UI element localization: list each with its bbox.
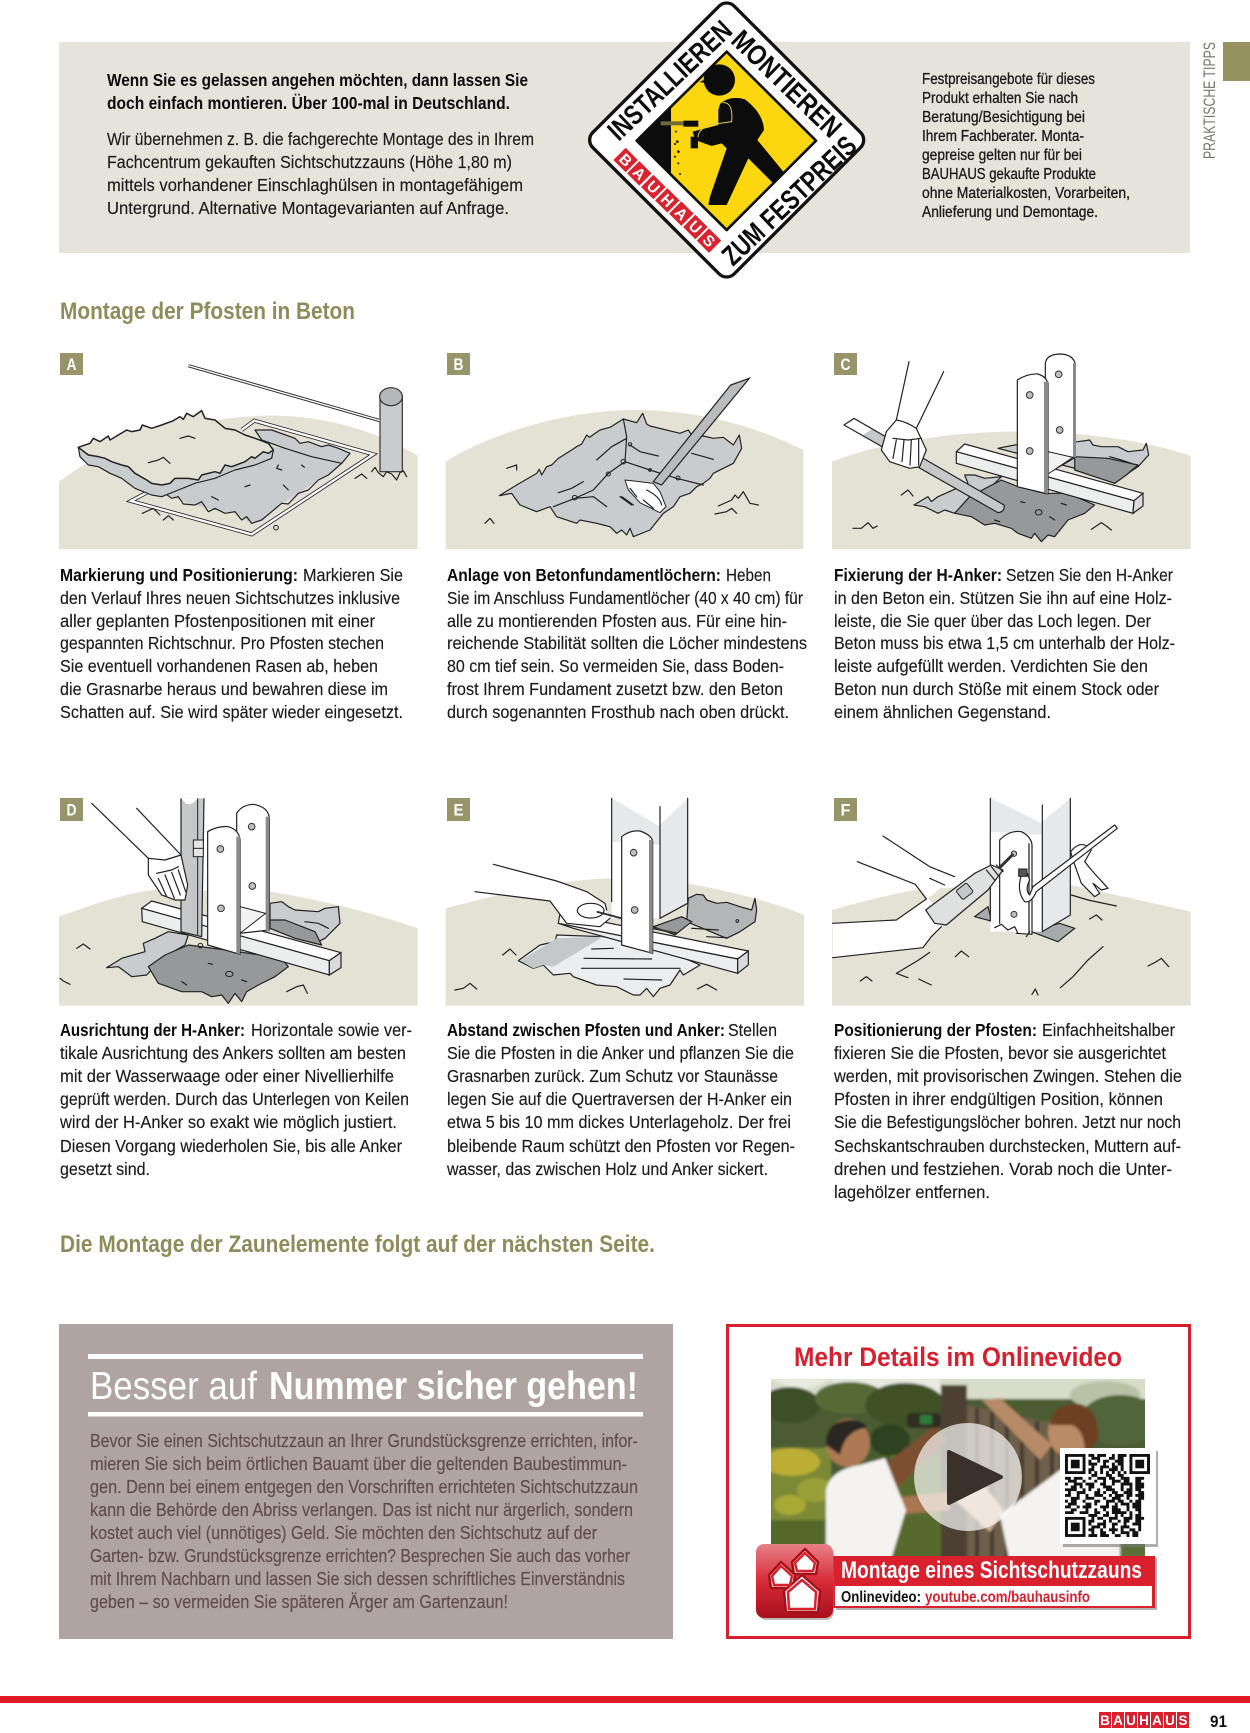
fixed price note: Produkt erhalten Sie nach bbox=[922, 90, 1078, 107]
text: step E: legen Sie auf die Quertraversen der H-Anker ein bbox=[447, 1089, 792, 1109]
text: step A bbox=[60, 565, 403, 722]
text: step C: leiste, die Sie quer über das Loch legen. Der bbox=[834, 611, 1151, 631]
text: step F: drehen und festziehen. Vorab noch die Unter- bbox=[834, 1159, 1172, 1179]
text: step C: Fixierung der H-Anker: bbox=[834, 565, 1002, 585]
text: step C: Setzen Sie den H-Anker bbox=[1006, 565, 1173, 585]
text: step E: Grasnarben zurück. Zum Schutz vor Staunässe bbox=[447, 1066, 778, 1086]
text: step E: Abstand zwischen Pfosten und Anker: bbox=[447, 1020, 725, 1040]
red BAUHAUS tiles bbox=[613, 148, 721, 253]
text: step D: Ausrichtung der H-Anker: bbox=[60, 1020, 245, 1040]
step badge C bbox=[834, 353, 857, 375]
panel body text: mieren Sie sich beim örtlichen Bauamt über die geltenden Baubestimmun- bbox=[90, 1454, 627, 1474]
text: step B: reichende Stabilität sollten die Löcher mindestens bbox=[447, 633, 807, 653]
intro text: Fachcentrum gekauften Sichtschutzzauns (Höhe 1,80 m) bbox=[107, 152, 512, 172]
illustration C: fixing the H-anchor bbox=[832, 354, 1191, 549]
red banner bbox=[833, 1556, 1157, 1610]
fixed price note: gepreise gelten nur für bei bbox=[922, 147, 1082, 164]
badge: Installieren Montieren zum Festpreis bbox=[585, 0, 868, 281]
banner URL bbox=[841, 1589, 1090, 1606]
text: step F: lagehölzer entfernen. bbox=[834, 1182, 990, 1202]
badge lettering: MONTIEREN bbox=[725, 24, 848, 144]
text: step C: in den Beton ein. Stützen Sie ihn auf eine Holz- bbox=[834, 588, 1172, 608]
red BAUHAUS tiles: U bbox=[685, 218, 705, 238]
step badge D: D bbox=[66, 800, 76, 820]
red BAUHAUS tiles: A bbox=[629, 164, 649, 184]
fixed price note: Beratung/Besichtigung bei bbox=[922, 109, 1085, 126]
step badge B bbox=[447, 353, 470, 375]
text: step E: Sie die Pfosten in die Anker und pflanzen Sie die bbox=[447, 1043, 794, 1063]
text: step C: leiste aufgefüllt werden. Verdichten Sie den bbox=[834, 656, 1148, 676]
intro text bbox=[107, 70, 534, 218]
page number: 91 bbox=[1210, 1712, 1227, 1731]
fixed price note bbox=[922, 71, 1130, 221]
panel body text: kann die Behörde den Abriss verlangen. Das ist nicht nur ärgerlich, sondern bbox=[90, 1500, 633, 1520]
section label: PRAKTISCHE TIPPS bbox=[1200, 42, 1219, 159]
text: step A: Schatten auf. Sie wird später wieder eingesetzt. bbox=[60, 702, 403, 722]
fixed price note: ohne Materialkosten, Vorarbeiten, bbox=[922, 185, 1130, 202]
panel body text: Bevor Sie einen Sichtschutzzaun an Ihrer Grundstücksgrenze errichten, infor- bbox=[90, 1431, 638, 1451]
intro text: Wir übernehmen z. B. die fachgerechte Montage des in Ihrem bbox=[107, 129, 534, 149]
text: step F: Sechskantschrauben durchstecken, Muttern auf- bbox=[834, 1136, 1181, 1156]
panel body text: kostet auch viel (unnötiges) Geld. Sie möchten den Sichtschutz auf der bbox=[90, 1523, 597, 1543]
red BAUHAUS tiles: S bbox=[699, 232, 718, 251]
side tab bbox=[1200, 42, 1250, 159]
text: step B: durch sogenannten Frosthub nach oben drückt. bbox=[447, 702, 789, 722]
top info panel bbox=[59, 42, 1190, 253]
illustration A: marking and removing turf bbox=[59, 366, 418, 549]
footer BAUHAUS logo: A bbox=[1152, 1713, 1162, 1728]
text: step B: Anlage von Betonfundamentlöchern: bbox=[447, 565, 721, 585]
video still photo bbox=[771, 1379, 1145, 1556]
text: step B: alle zu montierenden Pfosten aus. Für eine hin- bbox=[447, 611, 787, 631]
fixed price note: Ihrem Fachberater. Monta- bbox=[922, 128, 1084, 145]
text: step D: gesetzt sind. bbox=[60, 1159, 150, 1179]
heading: Montage der Pfosten in Beton: Montage der Pfosten in Beton bbox=[60, 298, 355, 325]
left worker bbox=[884, 1425, 946, 1488]
intro text: doch einfach montieren. Über 100-mal in Deutschland. bbox=[107, 93, 510, 113]
text: step D: geprüft werden. Durch das Unterlegen von Keilen bbox=[60, 1089, 409, 1109]
text: step F: werden, mit provisorischen Zwingen. Stehen die bbox=[833, 1066, 1182, 1086]
intro text: Wenn Sie es gelassen angehen möchten, dann lassen Sie bbox=[107, 70, 528, 90]
banner title: Montage eines Sichtschutzzauns bbox=[841, 1557, 1142, 1584]
text: step C: Beton muss bis etwa 1,5 cm unterhalb der Holz- bbox=[834, 633, 1175, 653]
step badge C: C bbox=[840, 355, 850, 374]
text: step A: die Grasnarbe heraus und bewahren diese im bbox=[60, 679, 388, 699]
fixed price note: Festpreisangebote für dieses bbox=[922, 71, 1095, 88]
footer BAUHAUS logo: U bbox=[1165, 1713, 1175, 1728]
text: step E: Stellen bbox=[728, 1020, 777, 1040]
illustration E: spacing between post and anchor bbox=[446, 798, 804, 1006]
text: step B bbox=[447, 565, 807, 722]
badge lettering: ZUM FESTPREIS bbox=[716, 130, 863, 271]
red BAUHAUS tiles: U bbox=[643, 178, 663, 198]
panel title bbox=[90, 1365, 638, 1408]
fixed price note: BAUHAUS gekaufte Produkte bbox=[922, 166, 1096, 183]
text: step F bbox=[833, 1020, 1182, 1202]
step badge B: B bbox=[454, 355, 464, 374]
fence bbox=[966, 1405, 1060, 1563]
footer BAUHAUS logo: H bbox=[1139, 1713, 1149, 1728]
text: step F: Positionierung der Pfosten: bbox=[834, 1020, 1037, 1040]
text: step D: Diesen Vorgang wiederholen Sie, bis alle Anker bbox=[60, 1136, 402, 1156]
banner URL: youtube.com/bauhausinfo bbox=[925, 1589, 1090, 1606]
worker figure bbox=[661, 64, 783, 205]
banner URL: Onlinevideo: bbox=[841, 1589, 921, 1606]
step badge F: F bbox=[840, 800, 850, 820]
text: step F: Sie die Befestigungslöcher bohren. Jetzt nur noch bbox=[834, 1112, 1181, 1132]
text: step E: bleibende Raum schützt den Pfosten vor Regen- bbox=[447, 1136, 795, 1156]
panel: Besser auf Nummer sicher gehen bbox=[59, 1324, 673, 1639]
intro text: mittels vorhandener Einschlaghülsen in montagefähigem bbox=[107, 175, 523, 195]
step badge D bbox=[60, 798, 83, 821]
panel body text: mit Ihrem Nachbarn und lassen Sie sich dessen schriftliches Einverständnis bbox=[90, 1569, 625, 1589]
text: step F: Pfosten in ihrer endgültigen Position, können bbox=[834, 1089, 1163, 1109]
panel title: Besser auf bbox=[90, 1365, 257, 1408]
play button bbox=[914, 1423, 1022, 1531]
text: step B: frost Ihrem Fundament zusetzt bzw. den Beton bbox=[447, 679, 783, 699]
text: step F: Einfachheitshalber bbox=[1042, 1020, 1175, 1040]
illustration F: drilling and clamping post bbox=[832, 798, 1191, 1006]
text: step C: einem ähnlichen Gegenstand. bbox=[834, 702, 1051, 722]
panel: Onlinevideo bbox=[728, 1326, 1190, 1638]
text: step A: Markieren Sie bbox=[303, 565, 403, 585]
panel body text bbox=[90, 1431, 638, 1612]
text: step A: gespannten Richtschnur. Pro Pfosten stechen bbox=[60, 633, 384, 653]
red BAUHAUS tiles: H bbox=[657, 191, 677, 211]
text: step D: wird der H-Anker so exakt wie möglich justiert. bbox=[59, 1112, 397, 1132]
footer BAUHAUS logo bbox=[1099, 1712, 1189, 1728]
text: step D: mit der Wasserwaage oder einer Nivellierhilfe bbox=[60, 1066, 394, 1086]
footer BAUHAUS logo: S bbox=[1178, 1713, 1188, 1728]
QR code bbox=[1060, 1448, 1158, 1547]
text: step C bbox=[834, 565, 1175, 722]
text: step E bbox=[446, 1020, 795, 1179]
illustration B: digging foundation holes bbox=[446, 378, 803, 549]
step badge E: E bbox=[454, 800, 464, 820]
right worker bbox=[982, 1398, 1052, 1460]
heading: next page note: Die Montage der Zaunelemente folgt auf der nächsten Seite. bbox=[60, 1231, 655, 1258]
panel title: Nummer sicher gehen! bbox=[269, 1365, 638, 1408]
text: step E: wasser, das zwischen Holz und Anker sickert. bbox=[446, 1159, 768, 1179]
footer BAUHAUS logo: U bbox=[1126, 1713, 1136, 1728]
step badge F bbox=[834, 798, 857, 821]
text: step B: Heben bbox=[726, 565, 771, 585]
panel body text: gen. Denn bei einem entgegen den Vorschriften errichteten Sichtschutzzaun bbox=[90, 1477, 638, 1497]
text: step B: Sie im Anschluss Fundamentlöcher (40 x 40 cm) für bbox=[447, 588, 803, 608]
footer BAUHAUS logo: A bbox=[1113, 1713, 1123, 1728]
text: step D bbox=[59, 1020, 412, 1179]
fixed price note: Anlieferung und Demontage. bbox=[922, 204, 1098, 221]
text: step A: Markierung und Positionierung: bbox=[60, 565, 298, 585]
text: step A: Sie eventuell vorhandenen Rasen ab, heben bbox=[60, 656, 378, 676]
step badge E bbox=[447, 798, 470, 821]
text: step B: 80 cm tief sein. So vermeiden Sie, dass Boden- bbox=[447, 656, 784, 676]
text: step E: etwa 5 bis 10 mm dickes Unterlageholz. Der frei bbox=[447, 1112, 791, 1132]
panel body text: geben – so vermeiden Sie späteren Ärger am Gartenzaun! bbox=[90, 1592, 508, 1612]
text: step A: aller geplanten Pfostenpositionen mit einer bbox=[60, 611, 375, 631]
text: step D: tikale Ausrichtung des Ankers sollten am besten bbox=[60, 1043, 406, 1063]
illustration D: aligning the H-anchor bbox=[59, 798, 418, 1006]
video title: Mehr Details im Onlinevideo bbox=[794, 1342, 1122, 1372]
text: step A: den Verlauf Ihres neuen Sichtschutzes inklusive bbox=[60, 588, 400, 608]
footer BAUHAUS logo: B bbox=[1100, 1713, 1110, 1728]
red BAUHAUS tiles: A bbox=[671, 204, 691, 224]
text: step F: fixieren Sie die Pfosten, bevor sie ausgerichtet bbox=[834, 1043, 1166, 1063]
text: step D: Horizontale sowie ver- bbox=[251, 1020, 412, 1040]
intro text: Untergrund. Alternative Montagevarianten auf Anfrage. bbox=[107, 198, 509, 218]
footer red bar bbox=[0, 1696, 1250, 1703]
text: step C: Beton nun durch Stöße mit einem Stock oder bbox=[834, 679, 1159, 699]
icon: red tile with houses bbox=[756, 1544, 834, 1620]
step badge A: A bbox=[66, 355, 76, 374]
badge lettering bbox=[601, 14, 863, 271]
step badge A bbox=[60, 353, 83, 375]
red BAUHAUS tiles: B bbox=[615, 151, 635, 171]
panel body text: Garten- bzw. Grundstücksgrenze errichten? Besprechen Sie auch das vorher bbox=[90, 1546, 630, 1566]
